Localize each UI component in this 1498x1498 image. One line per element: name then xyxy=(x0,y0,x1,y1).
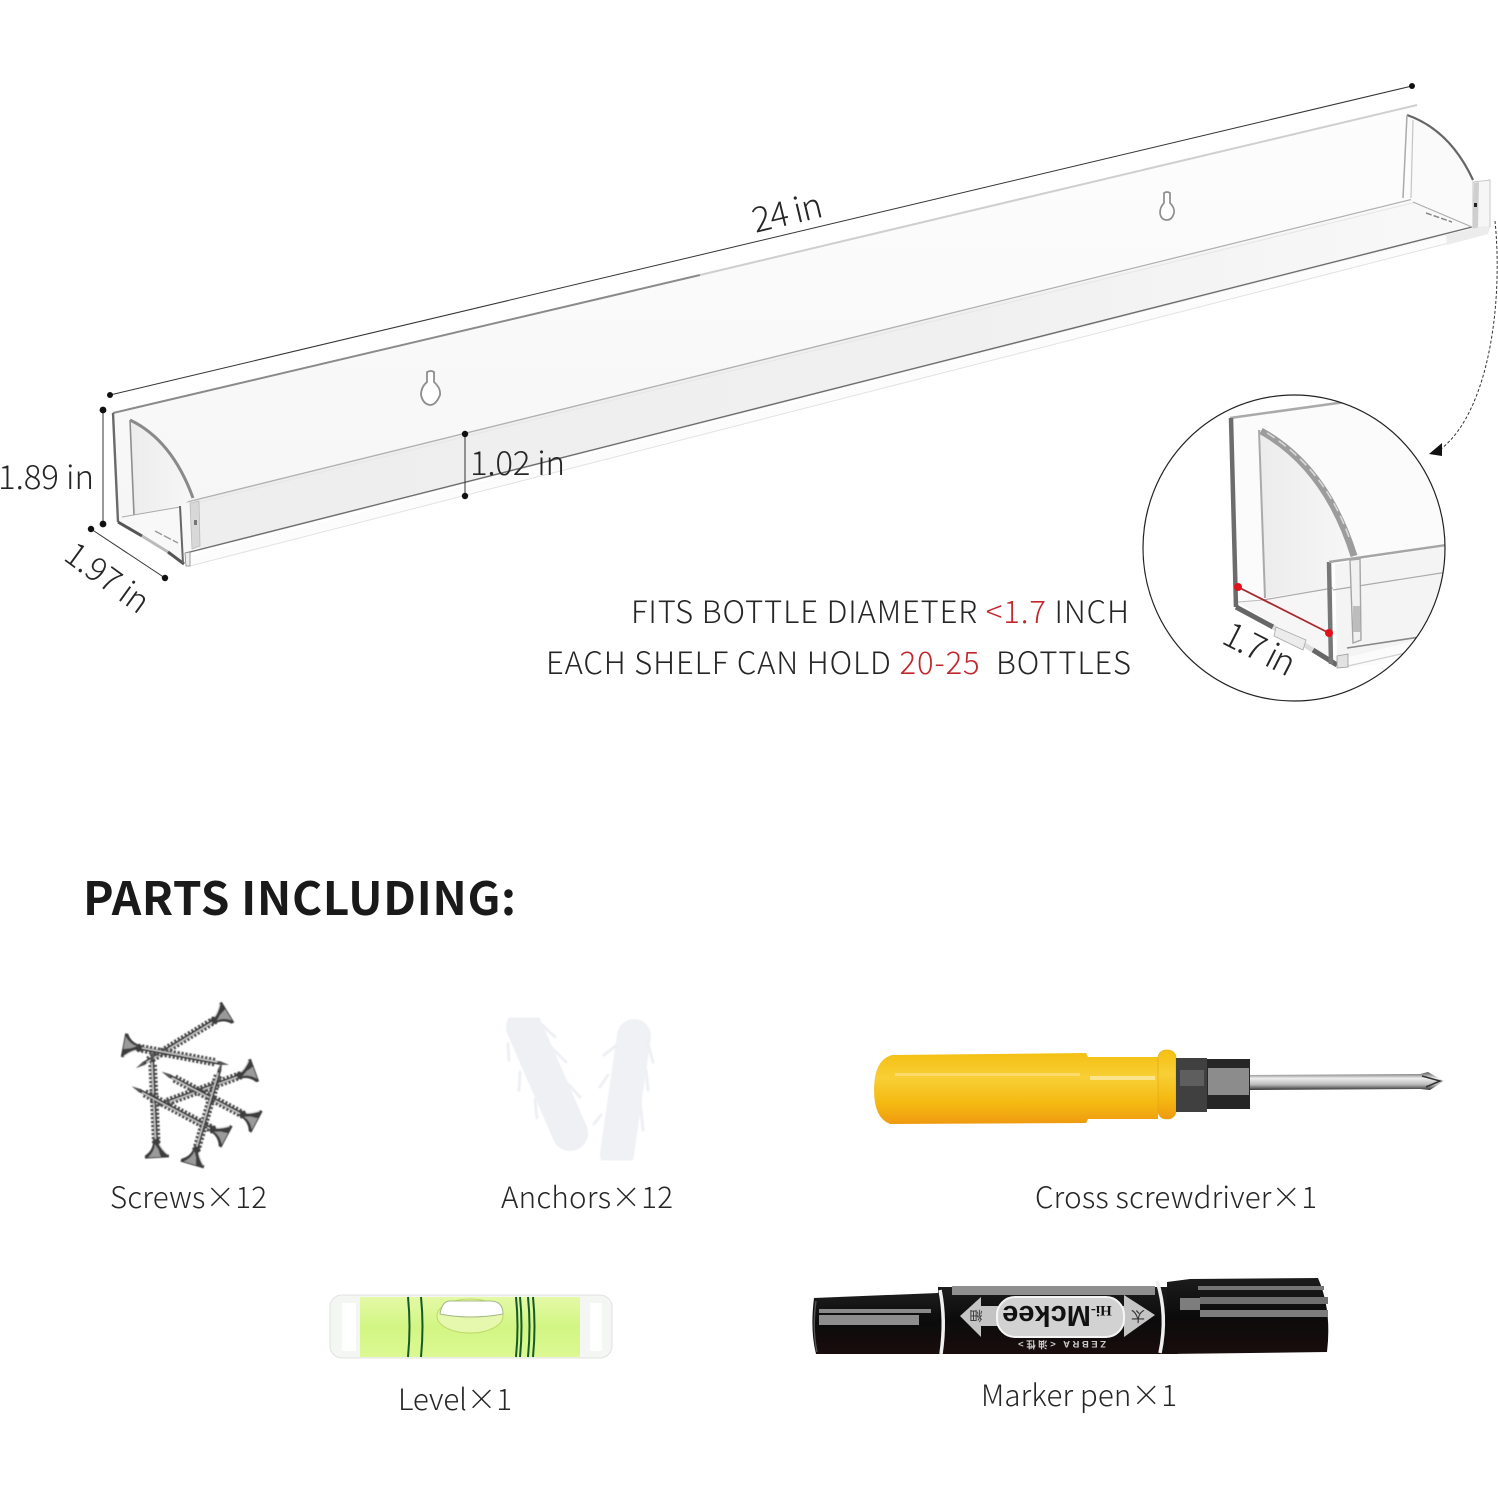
plate top edge xyxy=(1230,402,1345,418)
floor xyxy=(119,186,1473,565)
shelf illustration xyxy=(113,105,1490,566)
dimension: height 1.89 in xyxy=(0,407,106,527)
left end fin xyxy=(130,420,193,515)
label: level: Level×1 xyxy=(398,1377,512,1419)
dimension: lip height 1.02 in: 1.02 in xyxy=(470,437,565,485)
right end fin xyxy=(1407,115,1473,227)
left wall profile xyxy=(113,413,118,522)
icon: marker pen: 細 xyxy=(969,1307,983,1326)
detail circle xyxy=(1143,385,1460,701)
fin xyxy=(1260,430,1320,598)
arrow: dashed callout to detail xyxy=(1429,221,1497,456)
icon: marker pen xyxy=(812,1278,1328,1354)
heading: parts including: PARTS INCLUDING: xyxy=(83,863,516,929)
plate and lip fills xyxy=(1230,385,1460,607)
keyhole: left xyxy=(421,371,440,405)
icon: screws xyxy=(121,1002,263,1168)
lip lower edge xyxy=(186,227,1472,553)
label: screws: Screws×12 xyxy=(110,1175,267,1217)
detail label: 1.7 in xyxy=(1215,607,1306,687)
keyhole: right xyxy=(1160,192,1174,220)
label: screwdriver: Cross screwdriver×1 xyxy=(1035,1175,1317,1217)
lip xyxy=(1329,562,1331,664)
dimension: length 24 in: 24 in xyxy=(746,177,827,244)
right cap xyxy=(1167,1278,1328,1354)
shaft xyxy=(1250,1072,1444,1090)
label: marker pen: Marker pen×1 xyxy=(981,1373,1177,1415)
label arrow xyxy=(960,1295,1155,1337)
handle xyxy=(874,1053,1158,1124)
red diameter marker xyxy=(1234,583,1333,637)
icon: screwdriver xyxy=(874,1050,1444,1124)
ferrule xyxy=(1176,1058,1207,1112)
white rings xyxy=(940,1290,943,1354)
icon: marker pen: 太 xyxy=(1131,1306,1145,1326)
bottom edge strip xyxy=(190,227,1490,566)
icon: marker pen: ZEBRA <油性> xyxy=(1018,1338,1106,1350)
dimension: lip height 1.02 in xyxy=(462,431,565,499)
lip top edge xyxy=(183,180,1490,503)
right lip end xyxy=(1473,180,1490,228)
left wall and base xyxy=(1231,418,1236,607)
icon: wall anchors xyxy=(508,1024,653,1154)
text: bottle capacity: EACH SHELF CAN HOLD 20-25 BOTTLES xyxy=(546,638,1131,683)
brand text: Hi-Mckee xyxy=(1002,1299,1112,1331)
dimension: height 1.89 in: 1.89 in xyxy=(0,451,94,499)
text: bottle diameter: FITS BOTTLE DIAMETER <1.7 INCH xyxy=(631,587,1129,632)
left lip edge xyxy=(190,501,200,549)
dimension: depth 1.97 in: 1.97 in xyxy=(56,528,161,623)
back top edge xyxy=(113,275,700,413)
barrel xyxy=(938,1287,1178,1354)
left cap xyxy=(812,1293,938,1354)
back panel xyxy=(113,105,1417,521)
front lip xyxy=(195,186,1473,549)
label: anchors: Anchors×12 xyxy=(501,1175,673,1217)
dimension: length 24 in xyxy=(107,83,1415,398)
icon: bubble level xyxy=(330,1295,612,1358)
